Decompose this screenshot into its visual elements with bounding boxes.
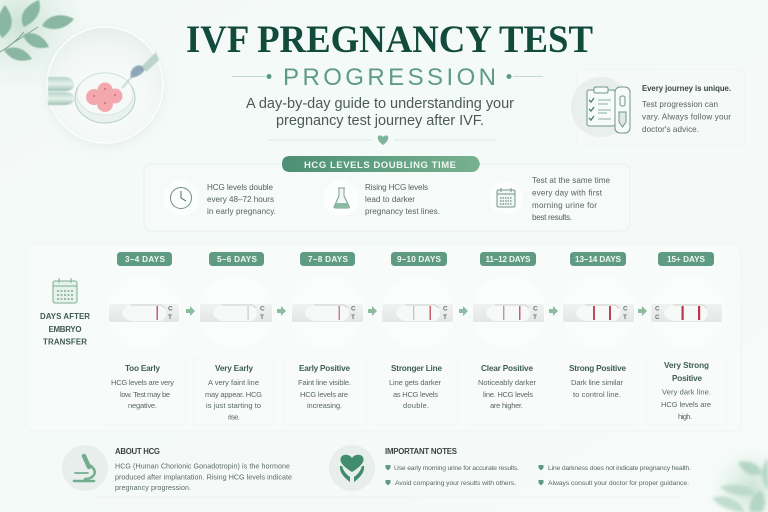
icon: heart in hands [329,445,375,491]
column 5: 11–12 days: line. HCG levels [483,390,533,399]
column 1: 3–4 days [101,252,185,425]
column 2: 5–6 days: A very faint line [208,378,259,387]
column 2: 5–6 days: Very Early [215,364,253,373]
icon: calendar [489,181,523,215]
text: about HCG: produced after implantation. Rising HCG levels indicate [115,474,292,482]
tagline: A day-by-day guide to understanding your [246,96,514,112]
text: testing time: best results. [532,213,572,222]
column 6: 13–14 days: T [623,314,627,321]
journey text: Every journey is unique. [642,84,731,93]
column 3: 7–8 days: Early Positive [299,364,350,373]
column 3: 7–8 days: T [351,314,355,321]
hero illustration: IVF petri dish [47,27,163,143]
title: IVF PREGNANCY TEST [186,18,593,61]
column 6: 13–14 days: Strong Positive [569,364,626,373]
column 4: 9–10 days: T [443,314,447,321]
column 5: 11–12 days: Clear Positive [481,364,533,373]
column 3: 7–8 days: C [351,306,356,312]
notes text: Use early morning urine for accurate results. [394,465,519,472]
panel: about HCG [62,445,680,497]
column 5: 11–12 days [467,252,547,425]
icon: calendar [53,278,77,303]
notes text: Always consult your doctor for proper guidance. [548,480,689,487]
notes text: Line darkness does not indicate pregnancy health. [548,465,691,472]
journey text: vary. Always follow your [642,112,731,122]
column 1: 3–4 days: 3–4 DAYS [125,255,166,264]
column 5: 11–12 days: are higher. [490,401,523,410]
icon: clipboard and test [571,77,631,137]
heading pill: HCG LEVELS DOUBLING TIME [304,160,456,171]
divider with heart [268,135,495,145]
pipette [122,52,159,88]
icon: microscope [62,445,108,491]
text: doubling: every 48–72 hours [207,195,274,204]
text: about HCG [115,447,292,492]
column 1: 3–4 days: C [168,306,173,312]
column 4: 9–10 days: C [443,306,448,312]
text: testing time: Test at the same time [532,176,610,185]
column 3: 7–8 days [284,252,366,425]
column 7: 15+ days: Very Strong [664,361,709,370]
column 6: 13–14 days: to control line. [573,390,621,399]
arrow 4 [459,306,468,316]
notes text [394,465,691,487]
petri dish [75,73,135,123]
column 5: 11–12 days: T [533,314,537,321]
column 2: 5–6 days: 5–6 DAYS [217,255,258,264]
column 2: 5–6 days: may appear. HCG [205,390,262,399]
panel: HCG doubling time [144,156,630,231]
arrow 2 [277,306,286,316]
column 3: 7–8 days: increasing. [307,401,342,410]
decorative leaves: bottom right [710,446,768,512]
column 7: 15+ days [647,252,726,425]
column 6: 13–14 days: 13–14 DAYS [575,255,622,264]
column 2: 5–6 days [193,252,274,425]
column 2: 5–6 days: rise. [228,412,240,422]
tagline: pregnancy test journey after IVF. [276,113,484,129]
column 2: 5–6 days: is just starting to [206,401,261,410]
column 4: 9–10 days [376,252,457,425]
text: about HCG: HCG (Human Chorionic Gonadotropin) is the hormone [115,462,290,470]
text: testing time: every day with first [532,188,603,198]
column 6: 13–14 days: Dark line similar [571,378,624,387]
heading pill [282,156,480,172]
column 4: 9–10 days: Stronger Line [391,364,442,373]
label: days after embryo transfer: DAYS AFTER [40,312,90,321]
column 1: 3–4 days: low. Test may be [120,390,170,399]
column 5: 11–12 days: C [533,306,538,312]
panel: important notes: IMPORTANT NOTES [385,447,457,456]
journey text [642,84,731,134]
column 3: 7–8 days: Faint line visible. [298,378,351,387]
embryo cells [86,82,122,112]
subtitle word: progression [232,64,543,91]
column 7: 15+ days: HCG levels are [661,400,711,409]
label: days after embryo transfer: TRANSFER [43,338,87,346]
column 1: 3–4 days: Too Early [125,364,160,373]
subtitle word: progression: PROGRESSION [283,64,496,91]
text: about HCG: ABOUT HCG [115,447,160,456]
column 7: 15+ days: C [655,306,660,312]
text: doubling [207,183,276,216]
text: doubling: in early pregnancy. [207,207,276,216]
panel: important notes [329,445,691,491]
column 4: 9–10 days: as HCG levels [393,390,438,399]
column 3: 7–8 days: HCG levels are [300,390,348,399]
column 6: 13–14 days: C [623,306,628,312]
text: doubling: HCG levels double [207,183,273,192]
column 7: 15+ days: Positive [672,374,702,383]
column 7: 15+ days: high. [678,412,692,421]
column 4: 9–10 days: Line gets darker [389,378,442,387]
icon: clock [163,180,199,216]
text: testing time [532,176,610,222]
column 6: 13–14 days [557,252,637,425]
decorative leaves: top left [0,0,90,95]
column 1: 3–4 days: negative. [128,401,157,410]
column 7: 15+ days: C [655,314,660,321]
text: about HCG: pregnancy progression. [115,484,191,492]
column 5: 11–12 days: Noticeably darker [478,378,536,387]
text: darker lines: pregnancy test lines. [365,207,440,216]
text: darker lines: Rising HCG levels [365,183,428,192]
panel: journey note [571,69,745,146]
label: days after embryo transfer: EMBRYO [48,325,82,334]
journey text: doctor's advice. [642,125,699,134]
column 7: 15+ days: Very dark line. [662,388,711,396]
column 1: 3–4 days: T [168,314,172,321]
icon: flask [323,180,359,216]
note bullets [386,465,544,486]
column 1: 3–4 days: HCG levels are very [111,378,174,387]
column 5: 11–12 days: 11–12 DAYS [486,255,531,264]
arrow 6 [638,306,647,316]
column 2: 5–6 days: T [260,314,264,321]
text: testing time: morning urine for [532,201,597,210]
column 4: 9–10 days: 9–10 DAYS [397,255,442,264]
notes text: Avoid comparing your results with others. [395,480,516,487]
panel: timeline [26,244,741,431]
arrow 3 [368,306,377,316]
column 3: 7–8 days: 7–8 DAYS [308,255,349,264]
holder tubes [48,77,74,105]
tagline [246,96,514,129]
label: days after embryo transfer [40,312,90,346]
text: darker lines: lead to darker [365,195,415,204]
journey text: Test progression can [642,100,718,109]
text: darker lines [365,183,440,216]
column 7: 15+ days: 15+ DAYS [667,255,706,264]
column 4: 9–10 days: double. [403,401,429,410]
column 2: 5–6 days: C [260,306,265,312]
arrow 5 [549,306,558,316]
arrow 1 [186,306,195,316]
